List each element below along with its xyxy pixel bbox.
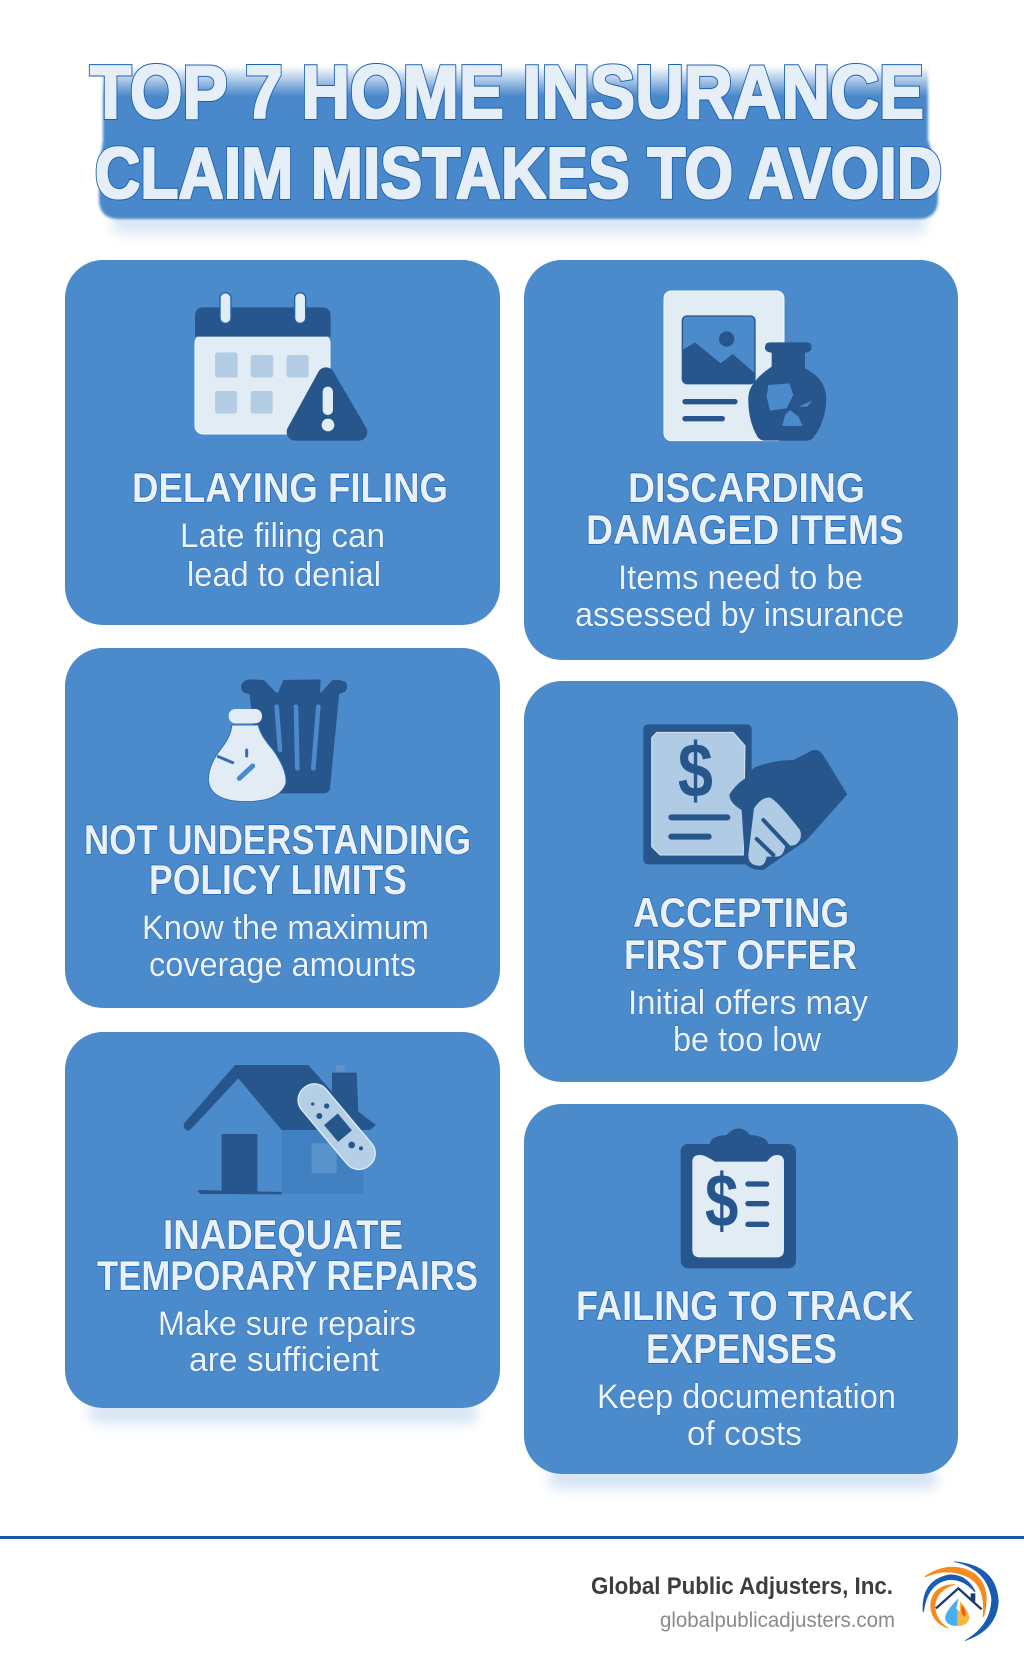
icon: house with bandage [184, 1065, 381, 1194]
description [597, 1378, 896, 1453]
heading: DISCARDING [628, 464, 865, 511]
icon: check and handshake [643, 724, 847, 870]
description: coverage amounts [149, 946, 416, 984]
heading: NOT UNDERSTANDING [84, 816, 471, 863]
description [575, 559, 904, 634]
heading [586, 464, 904, 553]
heading: FAILING TO TRACK [576, 1282, 914, 1329]
description: Know the maximum [142, 909, 429, 947]
heading: EXPENSES [646, 1325, 837, 1372]
heading [97, 1211, 478, 1299]
footer: website: globalpublicadjusters.com [660, 1609, 895, 1632]
icon: photo and broken vase [664, 291, 826, 441]
description: Initial offers may [628, 984, 868, 1022]
panel: failing to track expenses [524, 1104, 958, 1489]
panel: discarding damaged items [524, 260, 958, 660]
icon: clipboard with dollar [681, 1128, 796, 1268]
description [158, 1305, 416, 1379]
description: of costs [687, 1415, 802, 1453]
heading [84, 816, 471, 903]
description: Make sure repairs [158, 1305, 416, 1343]
heading: TEMPORARY REPAIRS [97, 1252, 478, 1299]
title banner [90, 50, 942, 234]
panel: inadequate temporary repairs [65, 1032, 500, 1423]
description: are sufficient [189, 1341, 380, 1379]
heading [624, 889, 857, 978]
heading: DAMAGED ITEMS [586, 506, 904, 553]
panel: accepting first offer [524, 681, 958, 1082]
title line 1: TOP 7 HOME INSURANCE [90, 50, 924, 134]
description: Late filing can [180, 517, 385, 555]
icon: money bag and trash can [208, 679, 347, 802]
heading: FIRST OFFER [624, 931, 857, 978]
heading: INADEQUATE [163, 1211, 403, 1258]
panel: not understanding policy limits [65, 648, 500, 1008]
icon: clipboard with dollar: $ [705, 1159, 738, 1243]
panel: delaying filing [65, 260, 500, 625]
description: Keep documentation [597, 1378, 896, 1416]
icon: calendar with warning [195, 293, 359, 434]
description: be too low [673, 1021, 821, 1059]
description: Items need to be [618, 559, 863, 597]
description [628, 984, 868, 1059]
heading: ACCEPTING [633, 889, 849, 936]
description [180, 517, 385, 594]
icon: company logo [923, 1562, 998, 1641]
heading: POLICY LIMITS [149, 856, 407, 903]
footer: company name: Global Public Adjusters, Inc. [591, 1573, 893, 1600]
heading: DELAYING FILING [132, 464, 448, 511]
heading [576, 1282, 914, 1372]
description: lead to denial [187, 556, 381, 594]
description: assessed by insurance [575, 596, 904, 634]
description [142, 909, 429, 984]
icon: check and handshake: $ [678, 729, 713, 814]
